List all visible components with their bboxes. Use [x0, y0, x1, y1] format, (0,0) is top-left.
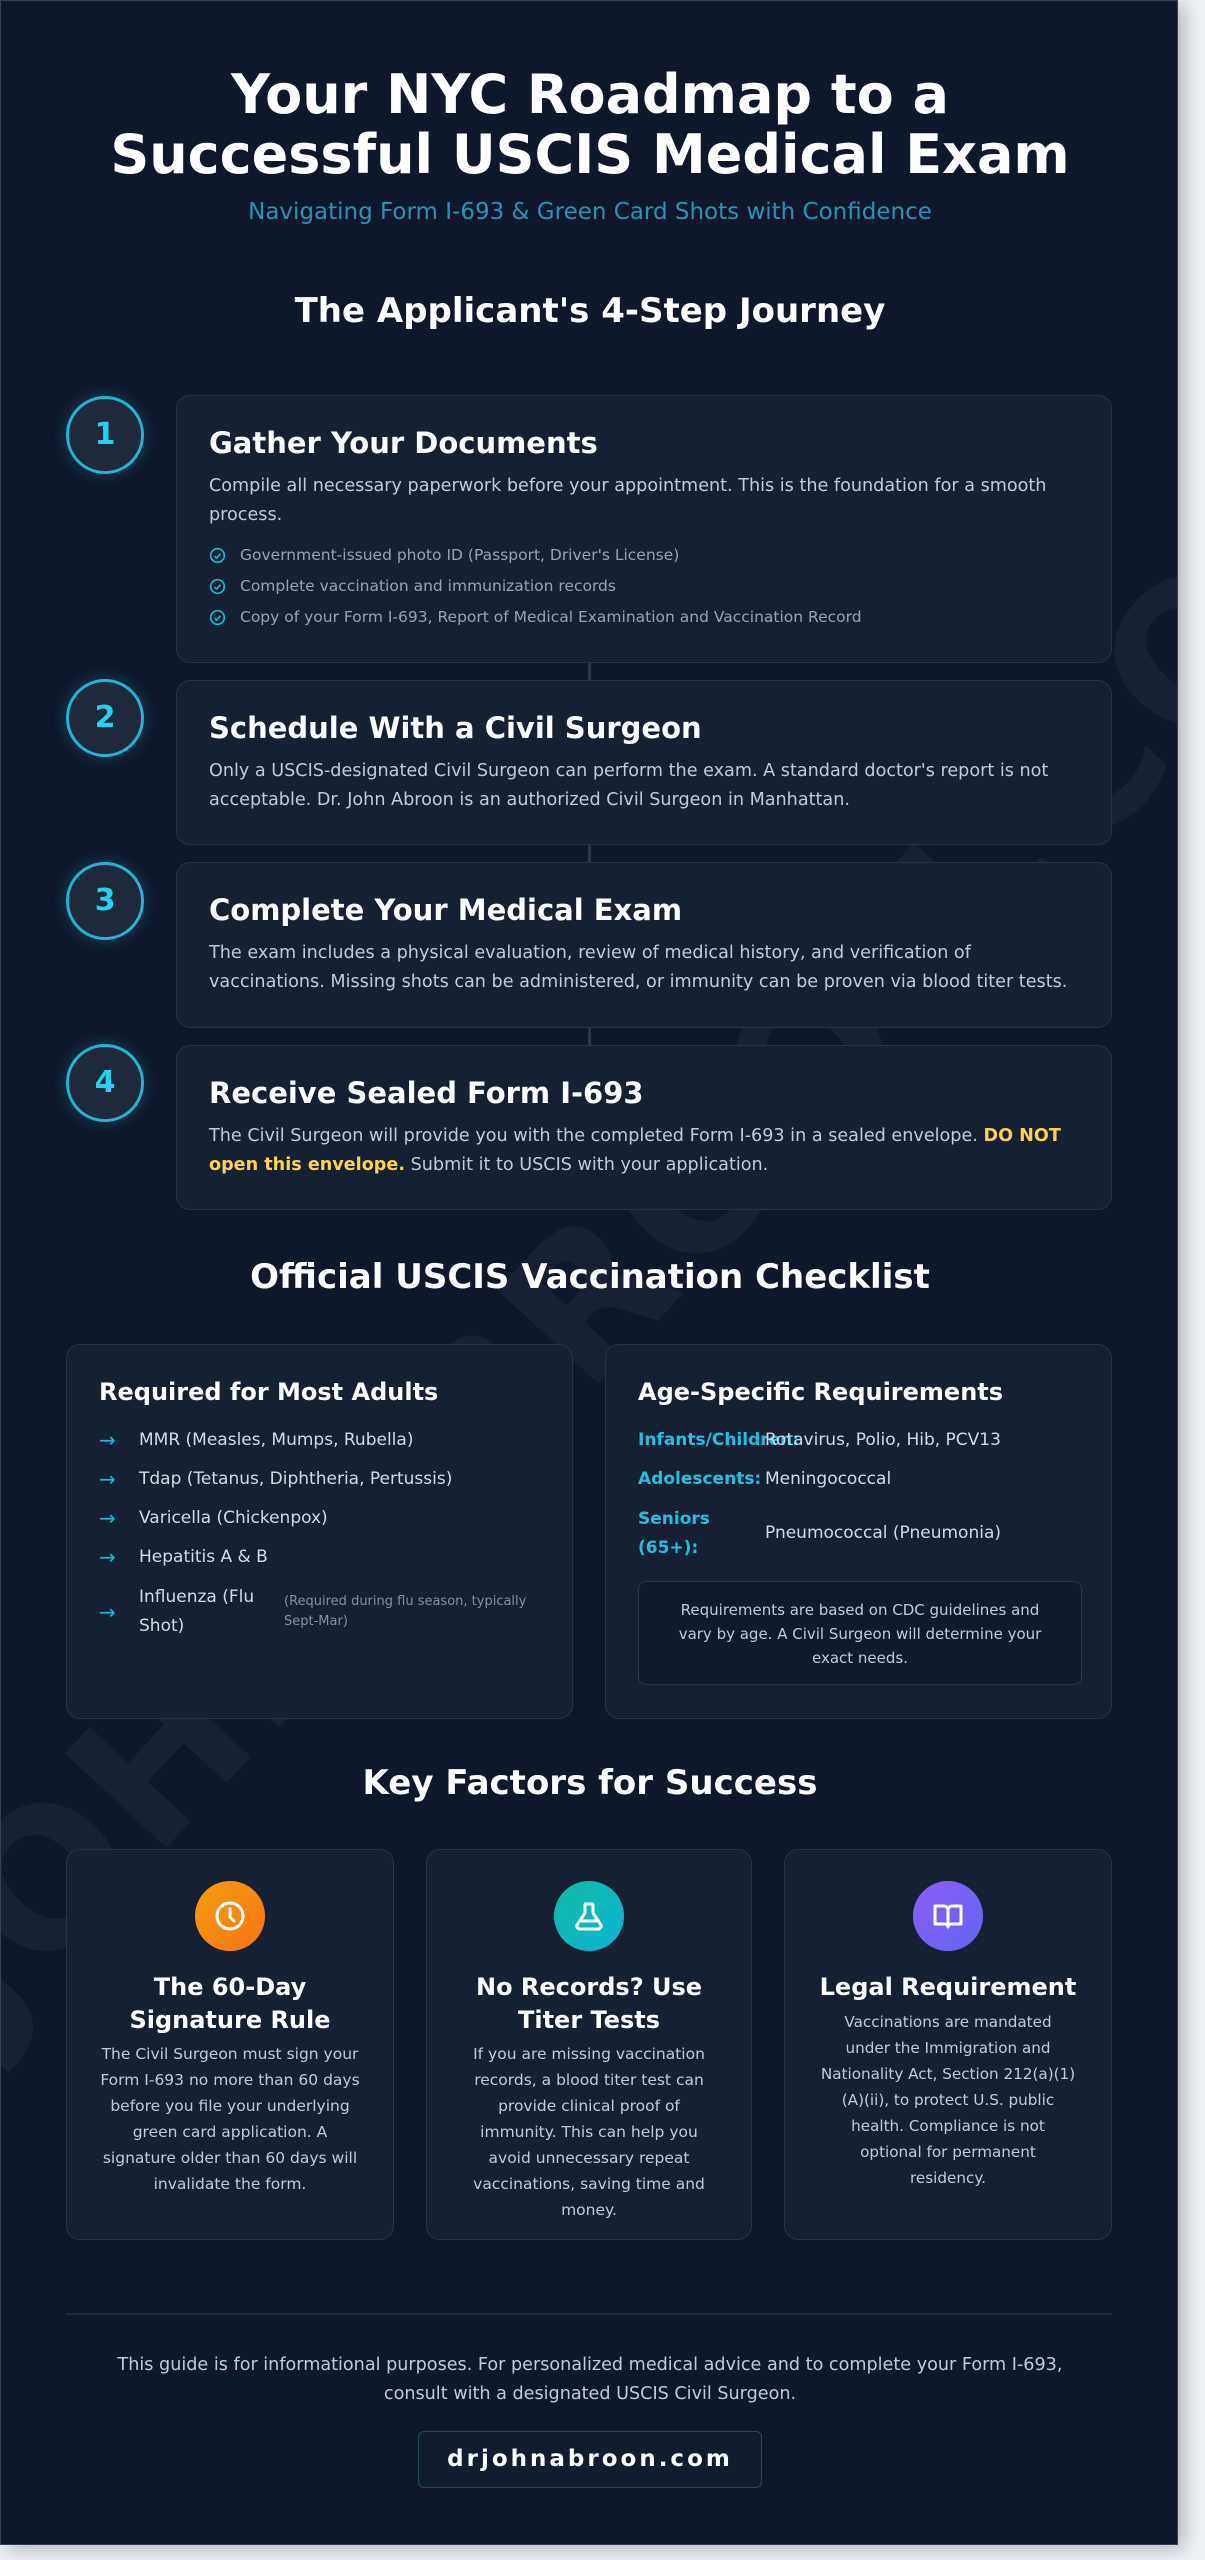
website button: drjohnabroon.com [447, 2446, 733, 2472]
panel: age-specific requirements: Adolescents: [638, 1469, 761, 1489]
step 1 card: Copy of your Form I-693, Report of Medical Examination and Vaccination Record [240, 608, 862, 626]
panel: required for most adults: Influenza (Flu Shot) [139, 1587, 254, 1636]
factor card: legal requirement: health. Compliance is not [851, 2117, 1045, 2135]
panel: required for most adults: MMR (Measles, Mumps, Rubella) [139, 1430, 413, 1450]
step 4 number [66, 1044, 144, 1122]
panel: required for most adults [66, 1344, 573, 1719]
panel: required for most adults: Varicella (Chickenpox) [139, 1508, 328, 1528]
panel: age-specific requirements: Age-Specific Requirements [638, 1378, 1003, 1406]
factor card: legal requirement: Nationality Act, Section 212(a)(1) [821, 2065, 1075, 2083]
step 4 card: The Civil Surgeon will provide you with the completed Form I-693 in a sealed envelope. DO NOT open this envelope. Submit it to USCIS with your application. [209, 1126, 1061, 1175]
panel: age-specific requirements [605, 1344, 1112, 1719]
step 1 card: Complete vaccination and immunization records [240, 577, 616, 595]
step 4 card: Receive Sealed Form I-693 [209, 1076, 644, 1110]
factor card: legal requirement: (A)(ii), to protect U.S. public [842, 2091, 1054, 2109]
icon: clock [195, 1881, 265, 1951]
factor card: 60-day rule: The Civil Surgeon must sign your Form I-693 no more than 60 days before you file your underlying green card application. A signature older than 60 days will invalidate the form. [100, 2045, 360, 2193]
factor card: 60-day rule: Signature Rule [129, 2006, 331, 2034]
website button [418, 2431, 762, 2488]
panel: required for most adults: (Required during flu season, typically Sept-Mar) [284, 1594, 526, 1629]
step 1 number [66, 396, 144, 474]
step 2 number: 2 [95, 700, 115, 735]
step 2 card: Only a USCIS-designated Civil Surgeon can perform the exam. A standard doctor's report is not acceptable. Dr. John Abroon is an authorized Civil Surgeon in Manhattan. [209, 761, 1048, 810]
panel: age-specific requirements: Rotavirus, Polio, Hib, PCV13 [765, 1430, 1001, 1450]
factor card: legal requirement: Legal Requirement [820, 1973, 1076, 2001]
panel: required for most adults: Hepatitis A & B [139, 1547, 268, 1567]
heading: key factors: Key Factors for Success [363, 1763, 817, 1803]
title: Successful USCIS Medical Exam [110, 123, 1070, 186]
factor card: legal requirement [784, 1849, 1112, 2240]
factor card: legal requirement: optional for permanent [860, 2143, 1036, 2161]
step 3 card [176, 862, 1112, 1028]
step 2 number [66, 679, 144, 757]
step 1 card: Compile all necessary paperwork before your appointment. This is the foundation for a smooth process. [209, 476, 1046, 525]
title [110, 63, 1070, 186]
factor card: titer tests: Titer Tests [518, 2006, 660, 2034]
factor card: 60-day rule [66, 1849, 394, 2240]
panel: required for most adults: → [99, 1467, 116, 1491]
panel: age-specific requirements: Meningococcal [765, 1469, 891, 1489]
heading: 4-step journey: The Applicant's 4-Step Journey [295, 291, 885, 331]
step 4 number: 4 [95, 1065, 115, 1100]
panel: required for most adults: → [99, 1545, 116, 1569]
panel: age-specific requirements: Pneumococcal (Pneumonia) [765, 1523, 1001, 1543]
step 3 card: Complete Your Medical Exam [209, 893, 682, 927]
title: Your NYC Roadmap to a [231, 63, 949, 126]
panel: required for most adults: → [99, 1428, 116, 1452]
footer disclaimer: consult with a designated USCIS Civil Surgeon. [384, 2384, 796, 2404]
step 3 number [66, 862, 144, 940]
step 3 card: The exam includes a physical evaluation, review of medical history, and verification of vaccinations. Missing shots can be administered, or immunity can be proven via blood titer tests. [209, 943, 1067, 992]
step 1 number: 1 [95, 417, 115, 452]
panel: required for most adults: Tdap (Tetanus, Diphtheria, Pertussis) [139, 1469, 452, 1489]
factor card: titer tests: No Records? Use [476, 1973, 702, 2001]
panel: required for most adults: Required for Most Adults [99, 1378, 438, 1406]
icon: book [913, 1881, 983, 1951]
factor card: 60-day rule: The 60-Day [154, 1973, 306, 2001]
factor card: legal requirement: Vaccinations are mandated [844, 2013, 1052, 2031]
step 2 card [176, 680, 1112, 845]
footer disclaimer [117, 2355, 1062, 2404]
note box [638, 1581, 1082, 1685]
step 1 card: Gather Your Documents [209, 426, 598, 460]
step 3 number: 3 [95, 883, 115, 918]
step 4 card [176, 1045, 1112, 1210]
panel: required for most adults: → [99, 1506, 116, 1530]
factor card: titer tests [426, 1849, 752, 2240]
step 2 card: Schedule With a Civil Surgeon [209, 711, 702, 745]
subtitle: Navigating Form I-693 & Green Card Shots with Confidence [248, 199, 932, 225]
panel: age-specific requirements: Seniors (65+): [638, 1509, 710, 1558]
panel: required for most adults: → [99, 1600, 116, 1624]
icon: flask [554, 1881, 624, 1951]
factor card: legal requirement: under the Immigration and [845, 2039, 1051, 2057]
factor card: legal requirement: residency. [910, 2169, 986, 2187]
step 1 card [176, 395, 1112, 663]
footer disclaimer: This guide is for informational purposes. For personalized medical advice and to complete your Form I-693, [118, 2355, 1062, 2375]
heading: vaccination checklist: Official USCIS Vaccination Checklist [250, 1257, 930, 1297]
panel: age-specific requirements: Infants/Children: [638, 1430, 799, 1450]
factor card: titer tests: If you are missing vaccination records, a blood titer test can provide clinical proof of immunity. This can help you avoid unnecessary repeat vaccinations, saving time and money. [473, 2045, 705, 2219]
note box: Requirements are based on CDC guidelines and vary by age. A Civil Surgeon will determine your exact needs. [679, 1601, 1041, 1667]
step 1 card: Government-issued photo ID (Passport, Driver's License) [240, 546, 679, 564]
